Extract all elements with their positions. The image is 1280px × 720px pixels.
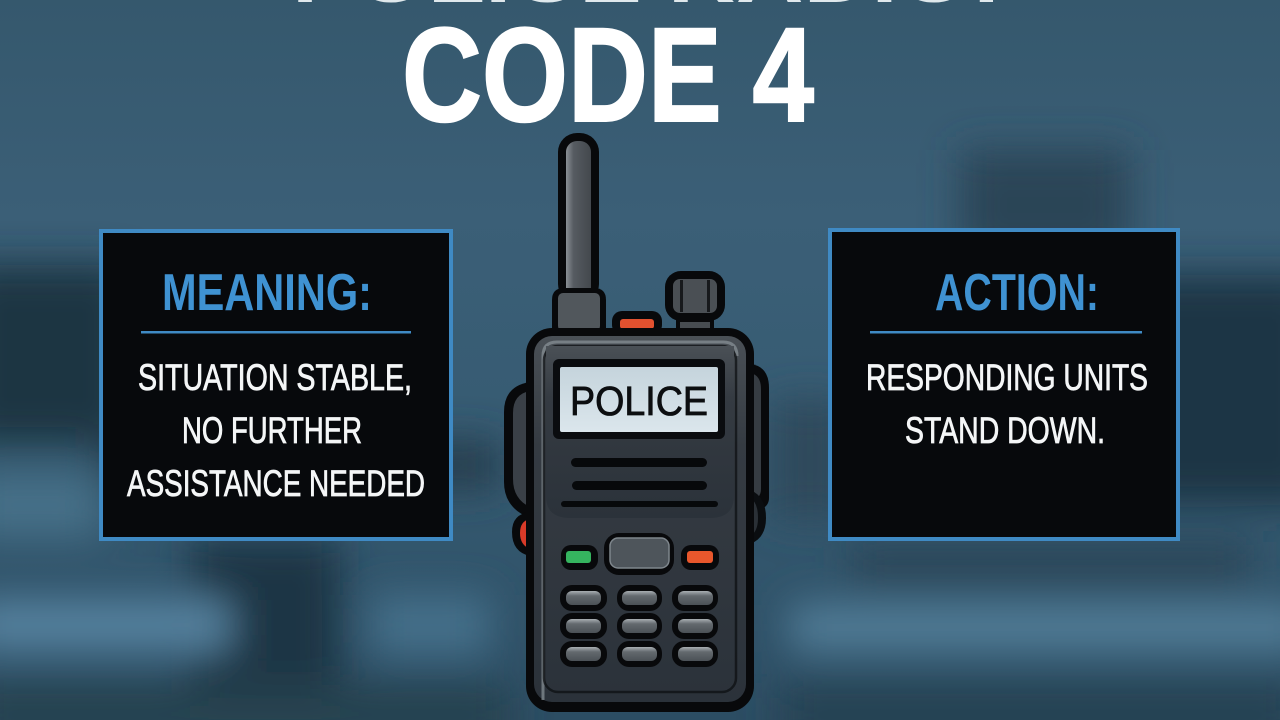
side grips [504, 364, 769, 556]
icon: police radio [504, 133, 769, 712]
heading: CODE 4: CODE 4 [402, 1, 814, 150]
orange top button [612, 311, 662, 335]
action text: RESPONDING UNITS [866, 357, 1148, 398]
panel: meaning [101, 231, 451, 539]
keypad [560, 585, 718, 667]
control buttons [561, 533, 719, 575]
meaning text [127, 357, 425, 504]
antenna [552, 133, 606, 331]
meaning text: NO FURTHER [182, 410, 362, 451]
meaning text: ASSISTANCE NEEDED [127, 463, 425, 504]
panel: action [830, 230, 1178, 539]
green button [561, 545, 598, 570]
centre button [604, 533, 674, 575]
radio body [526, 328, 754, 712]
title [292, 0, 1002, 150]
action text: STAND DOWN. [905, 410, 1105, 451]
orange button [681, 545, 719, 570]
screen [553, 359, 725, 439]
speaker grille [561, 458, 718, 507]
heading: action: ACTION: [935, 264, 1099, 322]
heading: meaning: MEANING: [162, 264, 372, 322]
meaning text: SITUATION STABLE, [138, 357, 412, 398]
volume knob [665, 271, 725, 331]
action text [866, 357, 1148, 451]
screen: POLICE [570, 378, 708, 424]
